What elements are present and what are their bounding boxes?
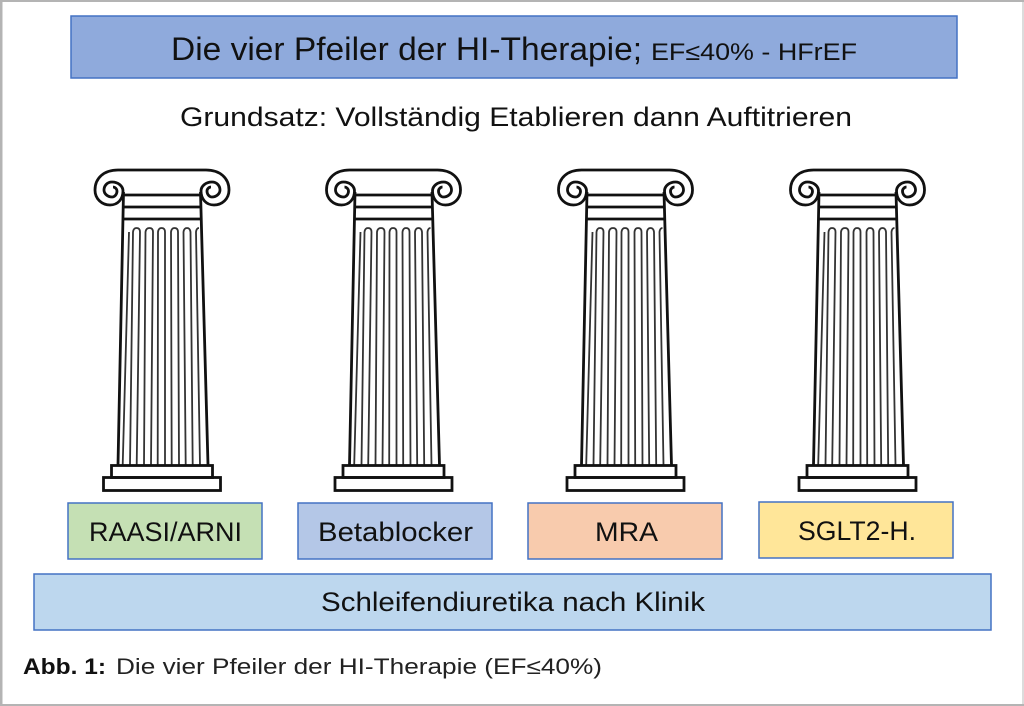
foundation bar: Schleifendiuretika: Schleifendiuretika nach Klinik <box>321 587 706 617</box>
subtitle: Grundsatz: Grundsatz: Vollständig Etablieren dann Auftitrieren <box>180 102 852 132</box>
foundation bar: Schleifendiuretika <box>34 574 991 630</box>
label box: Betablocker: Betablocker <box>318 517 473 547</box>
label box: RAASI/ARNI <box>68 503 262 559</box>
icon: pillar 1 <box>95 170 229 490</box>
caption: Abb. 1: <box>23 654 106 679</box>
label box: SGLT2-H. <box>759 502 953 558</box>
icon: pillar 4 <box>790 170 924 490</box>
caption: Die vier Pfeiler der HI-Therapie (EF≤40%) <box>116 654 602 679</box>
icon: pillar 3 <box>558 170 692 490</box>
title banner <box>71 16 957 78</box>
label box: RAASI/ARNI: RAASI/ARNI <box>89 517 242 547</box>
label box: Betablocker <box>298 503 492 559</box>
label box: MRA: MRA <box>595 517 658 547</box>
title banner: EF≤40% - HFrEF <box>651 39 857 66</box>
title banner: Die vier Pfeiler der HI-Therapie; <box>171 31 642 67</box>
icon: pillar 2 <box>326 170 460 490</box>
label box: SGLT2-H.: SGLT2-H. <box>798 516 916 546</box>
label box: MRA <box>528 503 722 559</box>
